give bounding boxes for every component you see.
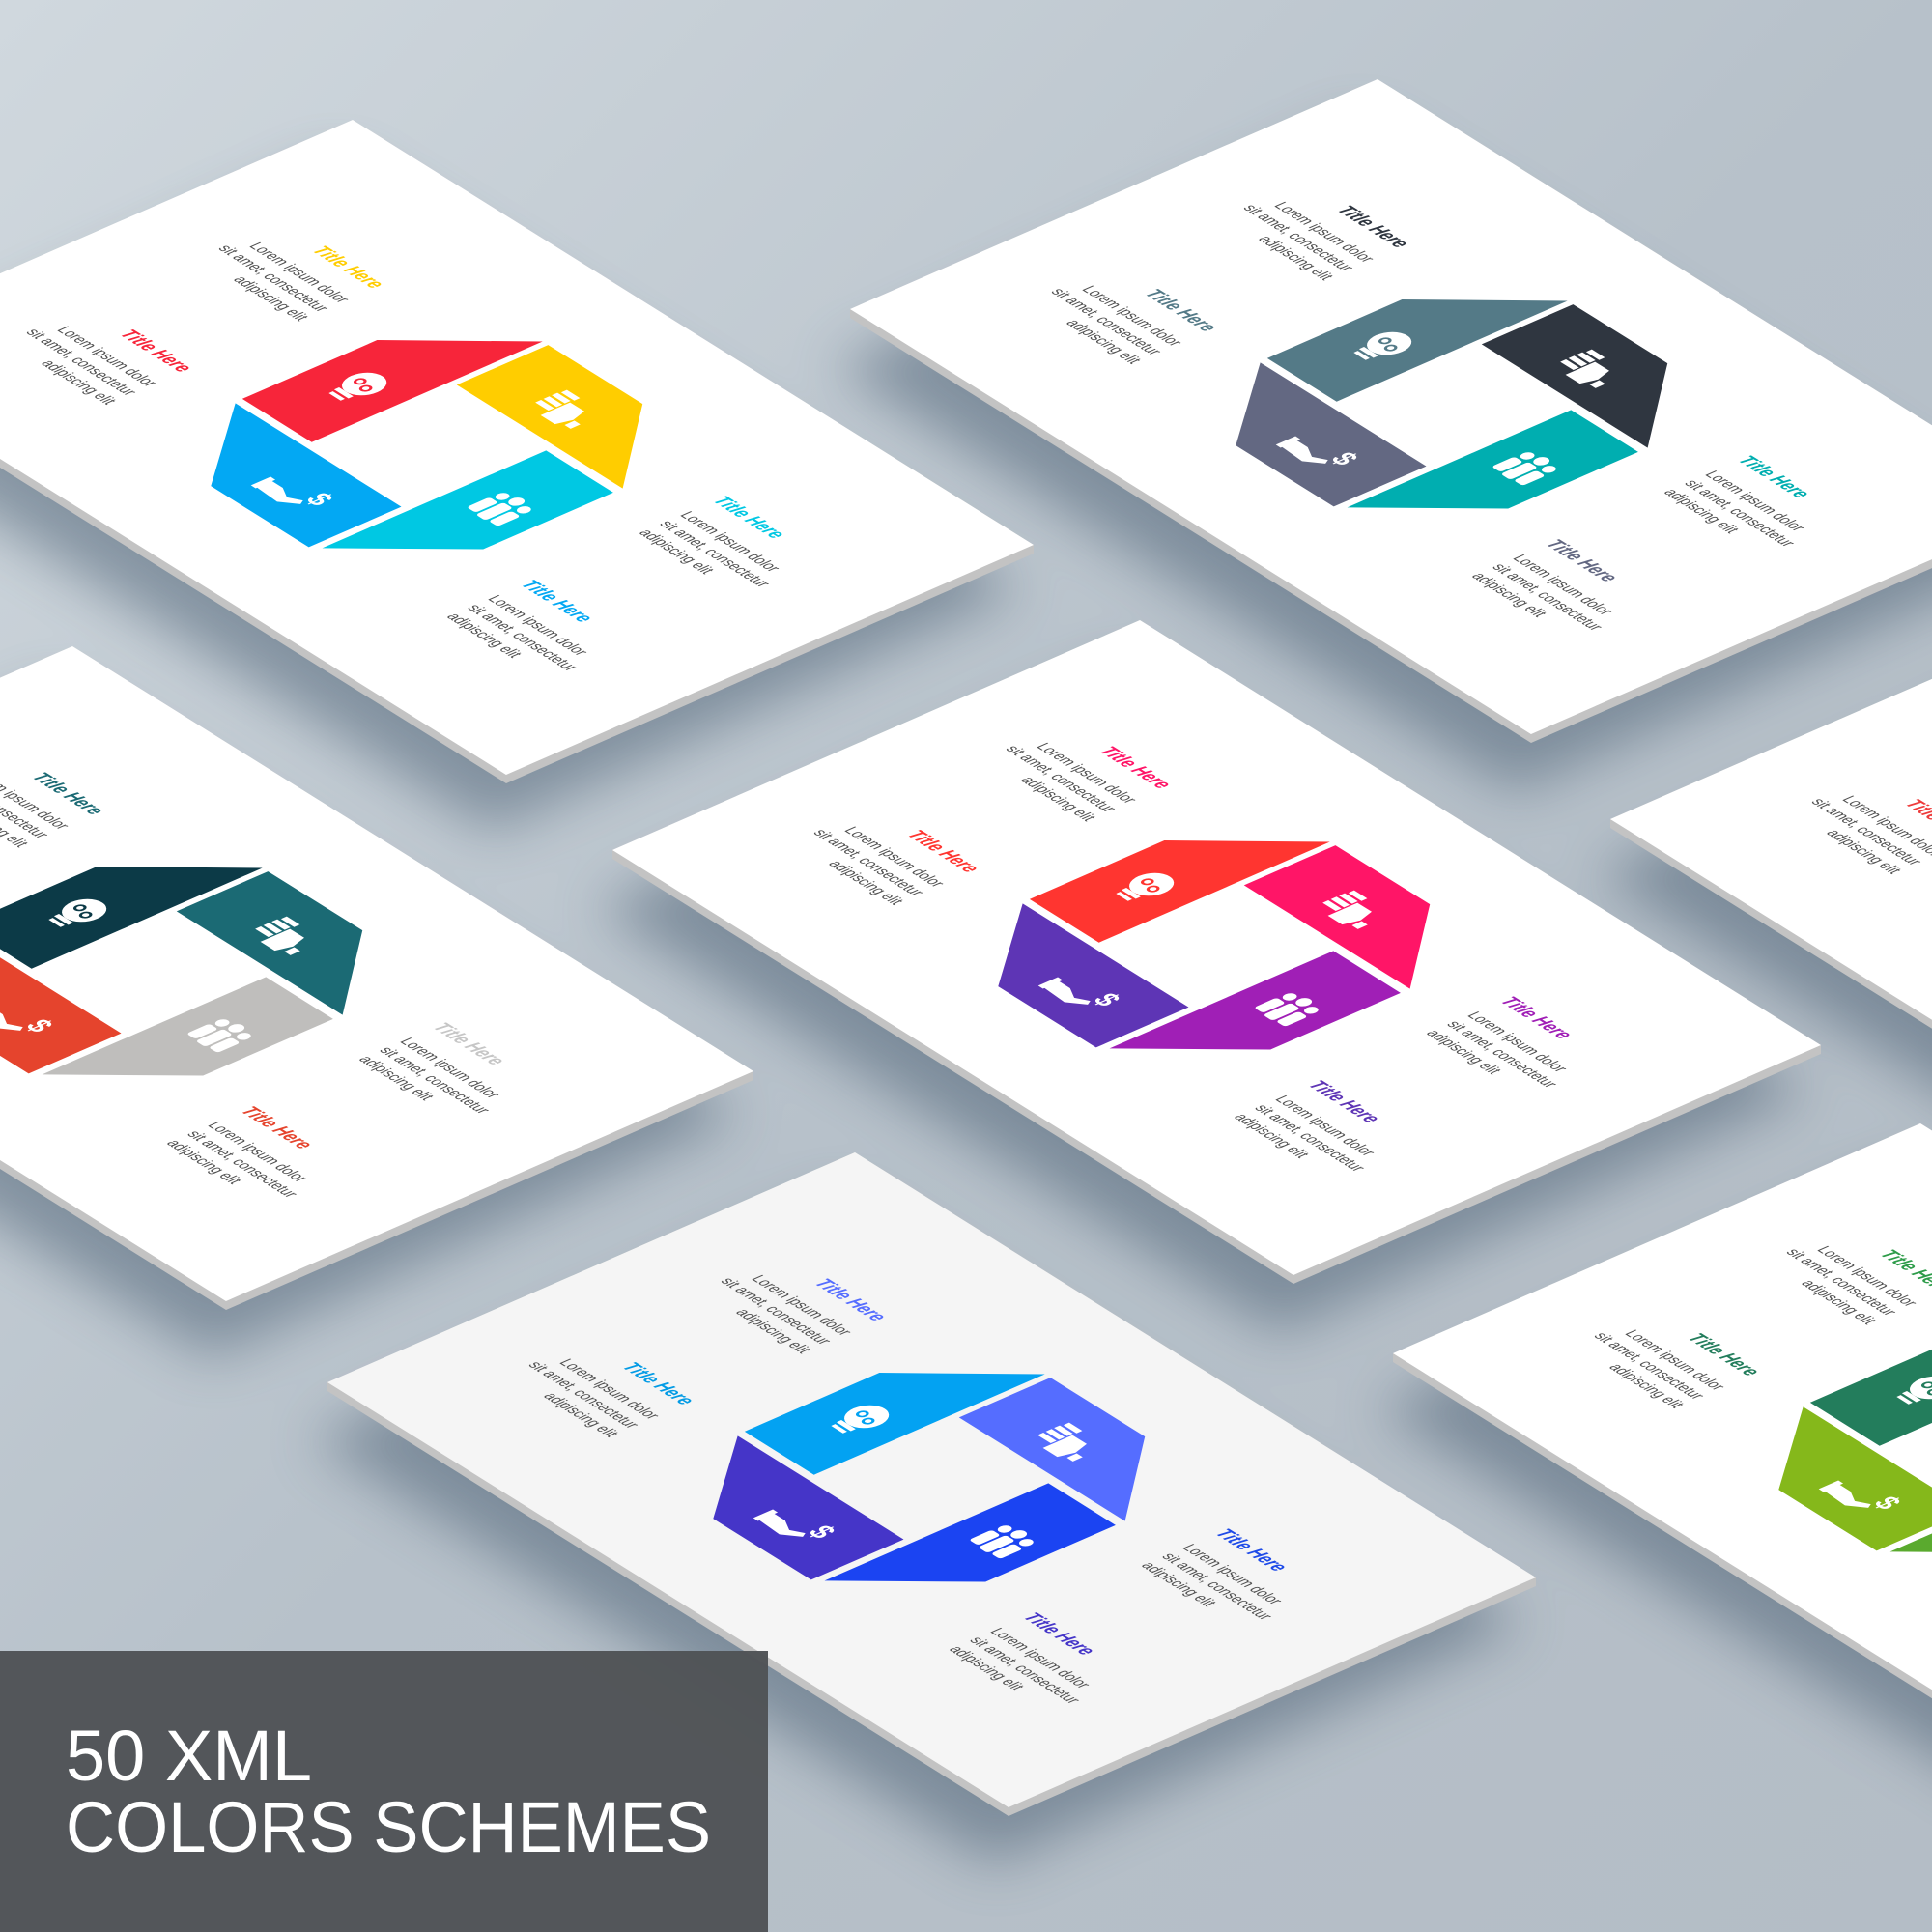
slide: bottom (blues): adipiscing elit: [539, 1391, 622, 1439]
slide: bottom (blues): sit amet, consectetur: [716, 1276, 835, 1347]
slide: center (red/pink/violet/purple): Lorem ipsum dolor: [1270, 1094, 1378, 1158]
slide: middle-left (dark teal/teal/gray/red): Lorem ipsum dolor: [395, 1036, 503, 1100]
slide: bottom (blues): Lorem ipsum dolor: [1178, 1542, 1286, 1606]
slide: right-middle (partial, red): [1610, 589, 1932, 1253]
slide: right-bottom (greens): Lorem ipsum dolor: [1620, 1328, 1728, 1393]
slide: top-right (slate/dark/teal/gray-purple): Lorem ipsum dolor: [1508, 553, 1616, 617]
slide: top-right (slate/dark/teal/gray-purple): adipiscing elit: [1660, 487, 1743, 536]
slide: middle-left (dark teal/teal/gray/red): Title Here: [235, 1104, 318, 1151]
slide: top-left (red/yellow/cyan/blue): Lorem ipsum dolor: [244, 241, 353, 305]
slide: top-right (slate/dark/teal/gray-purple): adipiscing elit: [1254, 234, 1337, 283]
slide: top-right (slate/dark/teal/gray-purple): Title Here: [1540, 537, 1623, 584]
slide: top-left (red/yellow/cyan/blue): Title Here: [114, 327, 197, 375]
slide: center (red/pink/violet/purple): sit amet, consectetur: [809, 827, 927, 898]
slide: bottom (blues): Lorem ipsum dolor: [554, 1357, 663, 1422]
slide: bottom (blues): Title Here: [616, 1360, 699, 1407]
slide: top-left (red/yellow/cyan/blue): Title Here: [515, 578, 598, 625]
slide: top-left (red/yellow/cyan/blue): adipiscing elit: [37, 358, 120, 407]
caption box: [0, 1651, 768, 1932]
slide: center (red/pink/violet/purple): Lorem ipsum dolor: [1463, 1009, 1571, 1074]
slide: center (red/pink/violet/purple): adipiscing elit: [824, 859, 907, 907]
slide: top-right (slate/dark/teal/gray-purple): sit amet, consectetur: [1046, 286, 1165, 357]
slide: top-left (red/yellow/cyan/blue): Title Here: [306, 243, 389, 292]
slide: center (red/pink/violet/purple): sit amet, consectetur: [1001, 744, 1120, 814]
slide: right-bottom (greens): [1393, 1123, 1932, 1787]
slide: top-right (slate/dark/teal/gray-purple): Lorem ipsum dolor: [1077, 284, 1185, 349]
slide: middle-left (dark teal/teal/gray/red): Title Here: [427, 1020, 510, 1068]
slide: top-left (red/yellow/cyan/blue): [0, 120, 1034, 783]
slide: top-left (red/yellow/cyan/blue): Lorem ipsum dolor: [675, 509, 783, 574]
slide: top-right (slate/dark/teal/gray-purple): adipiscing elit: [1062, 318, 1145, 366]
slide: center (red/pink/violet/purple): adipiscing elit: [1230, 1112, 1313, 1160]
slide: middle-left (dark teal/teal/gray/red): sit amet, consectetur: [375, 1045, 494, 1116]
slide: top-left (red/yellow/cyan/blue): Lorem ipsum dolor: [52, 325, 160, 389]
slide: top-right (slate/dark/teal/gray-purple): [850, 79, 1932, 743]
slide: top-right (slate/dark/teal/gray-purple): sit amet, consectetur: [1488, 561, 1606, 633]
slide: top-right (slate/dark/teal/gray-purple): Title Here: [1732, 453, 1815, 501]
slide: right-bottom (greens): adipiscing elit: [1605, 1362, 1688, 1410]
slide: center (red/pink/violet/purple): sit amet, consectetur: [1250, 1102, 1369, 1174]
slide: center (red/pink/violet/purple): Lorem ipsum dolor: [1032, 741, 1140, 806]
caption box: COLORS SCHEMES: [66, 1787, 711, 1867]
slide: right-bottom (greens): Lorem ipsum dolor: [1812, 1244, 1920, 1309]
slide: top-left (red/yellow/cyan/blue): sit amet, consectetur: [463, 602, 582, 673]
slide: bottom (blues): sit amet, consectetur: [965, 1634, 1084, 1706]
slide: middle-left (dark teal/teal/gray/red): adipiscing elit: [162, 1138, 245, 1186]
slide: bottom (blues): Title Here: [1209, 1526, 1293, 1575]
slide: bottom (blues): adipiscing elit: [945, 1644, 1028, 1692]
slide: center (red/pink/violet/purple): [612, 620, 1821, 1284]
slide: middle-left (dark teal/teal/gray/red): adipiscing elit: [355, 1054, 438, 1103]
caption box: 50 XML: [66, 1716, 312, 1796]
slide: top-right (slate/dark/teal/gray-purple): sit amet, consectetur: [1680, 478, 1799, 549]
slide: right-bottom (greens): sit amet, consectetur: [1781, 1247, 1900, 1318]
slide: top-left (red/yellow/cyan/blue): Lorem ipsum dolor: [483, 593, 591, 658]
slide: center (red/pink/violet/purple): Title Here: [1302, 1078, 1385, 1125]
slide: bottom (blues): Lorem ipsum dolor: [985, 1626, 1094, 1690]
slide: right-bottom (greens): adipiscing elit: [1797, 1278, 1880, 1327]
slide: right-middle (partial, red): adipiscing elit: [1822, 828, 1905, 876]
slide: center (red/pink/violet/purple): adipiscing elit: [1016, 775, 1099, 824]
slide: top-right (slate/dark/teal/gray-purple): sit amet, consectetur: [1238, 203, 1357, 273]
slide: top-right (slate/dark/teal/gray-purple): Title Here: [1139, 287, 1222, 334]
slide: middle-left (dark teal/teal/gray/red): Lorem ipsum dolor: [203, 1120, 311, 1184]
slide: bottom (blues): sit amet, consectetur: [524, 1359, 642, 1431]
slide: middle-left (dark teal/teal/gray/red): sit amet, consectetur: [183, 1128, 301, 1200]
slide: right-bottom (greens): Title Here: [1682, 1331, 1765, 1378]
slide: center (red/pink/violet/purple): Title Here: [901, 828, 984, 875]
slide: top-left (red/yellow/cyan/blue): adipiscing elit: [229, 274, 312, 324]
slide: top-left (red/yellow/cyan/blue): sit amet, consectetur: [655, 519, 774, 589]
slide: bottom (blues): Title Here: [1017, 1610, 1100, 1658]
slide: center (red/pink/violet/purple): sit amet, consectetur: [1442, 1019, 1561, 1090]
slide: middle-left (dark teal/teal/gray/red): [0, 646, 753, 1310]
slide: middle-left (dark teal/teal/gray/red): Title Here: [26, 770, 109, 818]
slide: bottom (blues): [327, 1152, 1536, 1816]
slide: bottom (blues): Lorem ipsum dolor: [747, 1273, 855, 1338]
slide: top-right (slate/dark/teal/gray-purple): Lorem ipsum dolor: [1269, 200, 1378, 265]
slide: center (red/pink/violet/purple): Title Here: [1094, 744, 1177, 792]
slide: top-left (red/yellow/cyan/blue): sit amet, consectetur: [213, 243, 332, 314]
slide: top-left (red/yellow/cyan/blue): sit amet, consectetur: [21, 327, 140, 398]
slide: top-left (red/yellow/cyan/blue): Title Here: [707, 494, 790, 542]
slide: right-bottom (greens): sit amet, consectetur: [1589, 1330, 1708, 1402]
slide: center (red/pink/violet/purple): Title Here: [1494, 994, 1577, 1042]
slide: right-middle (partial, red): sit amet, consectetur: [1806, 796, 1925, 867]
slide: top-left (red/yellow/cyan/blue): adipiscing elit: [442, 611, 526, 660]
slide: top-left (red/yellow/cyan/blue): adipiscing elit: [635, 527, 718, 577]
slide: center (red/pink/violet/purple): Lorem ipsum dolor: [839, 825, 948, 890]
slide: center (red/pink/violet/purple): adipiscing elit: [1422, 1028, 1505, 1077]
slide: bottom (blues): Title Here: [809, 1276, 892, 1324]
slide: bottom (blues): adipiscing elit: [731, 1307, 814, 1356]
slide: bottom (blues): sit amet, consectetur: [1157, 1551, 1276, 1622]
slide: top-right (slate/dark/teal/gray-purple): adipiscing elit: [1467, 571, 1550, 619]
slide: bottom (blues): adipiscing elit: [1137, 1560, 1220, 1609]
slide: top-right (slate/dark/teal/gray-purple): Title Here: [1331, 203, 1414, 251]
slide: top-right (slate/dark/teal/gray-purple): Lorem ipsum dolor: [1700, 469, 1808, 533]
